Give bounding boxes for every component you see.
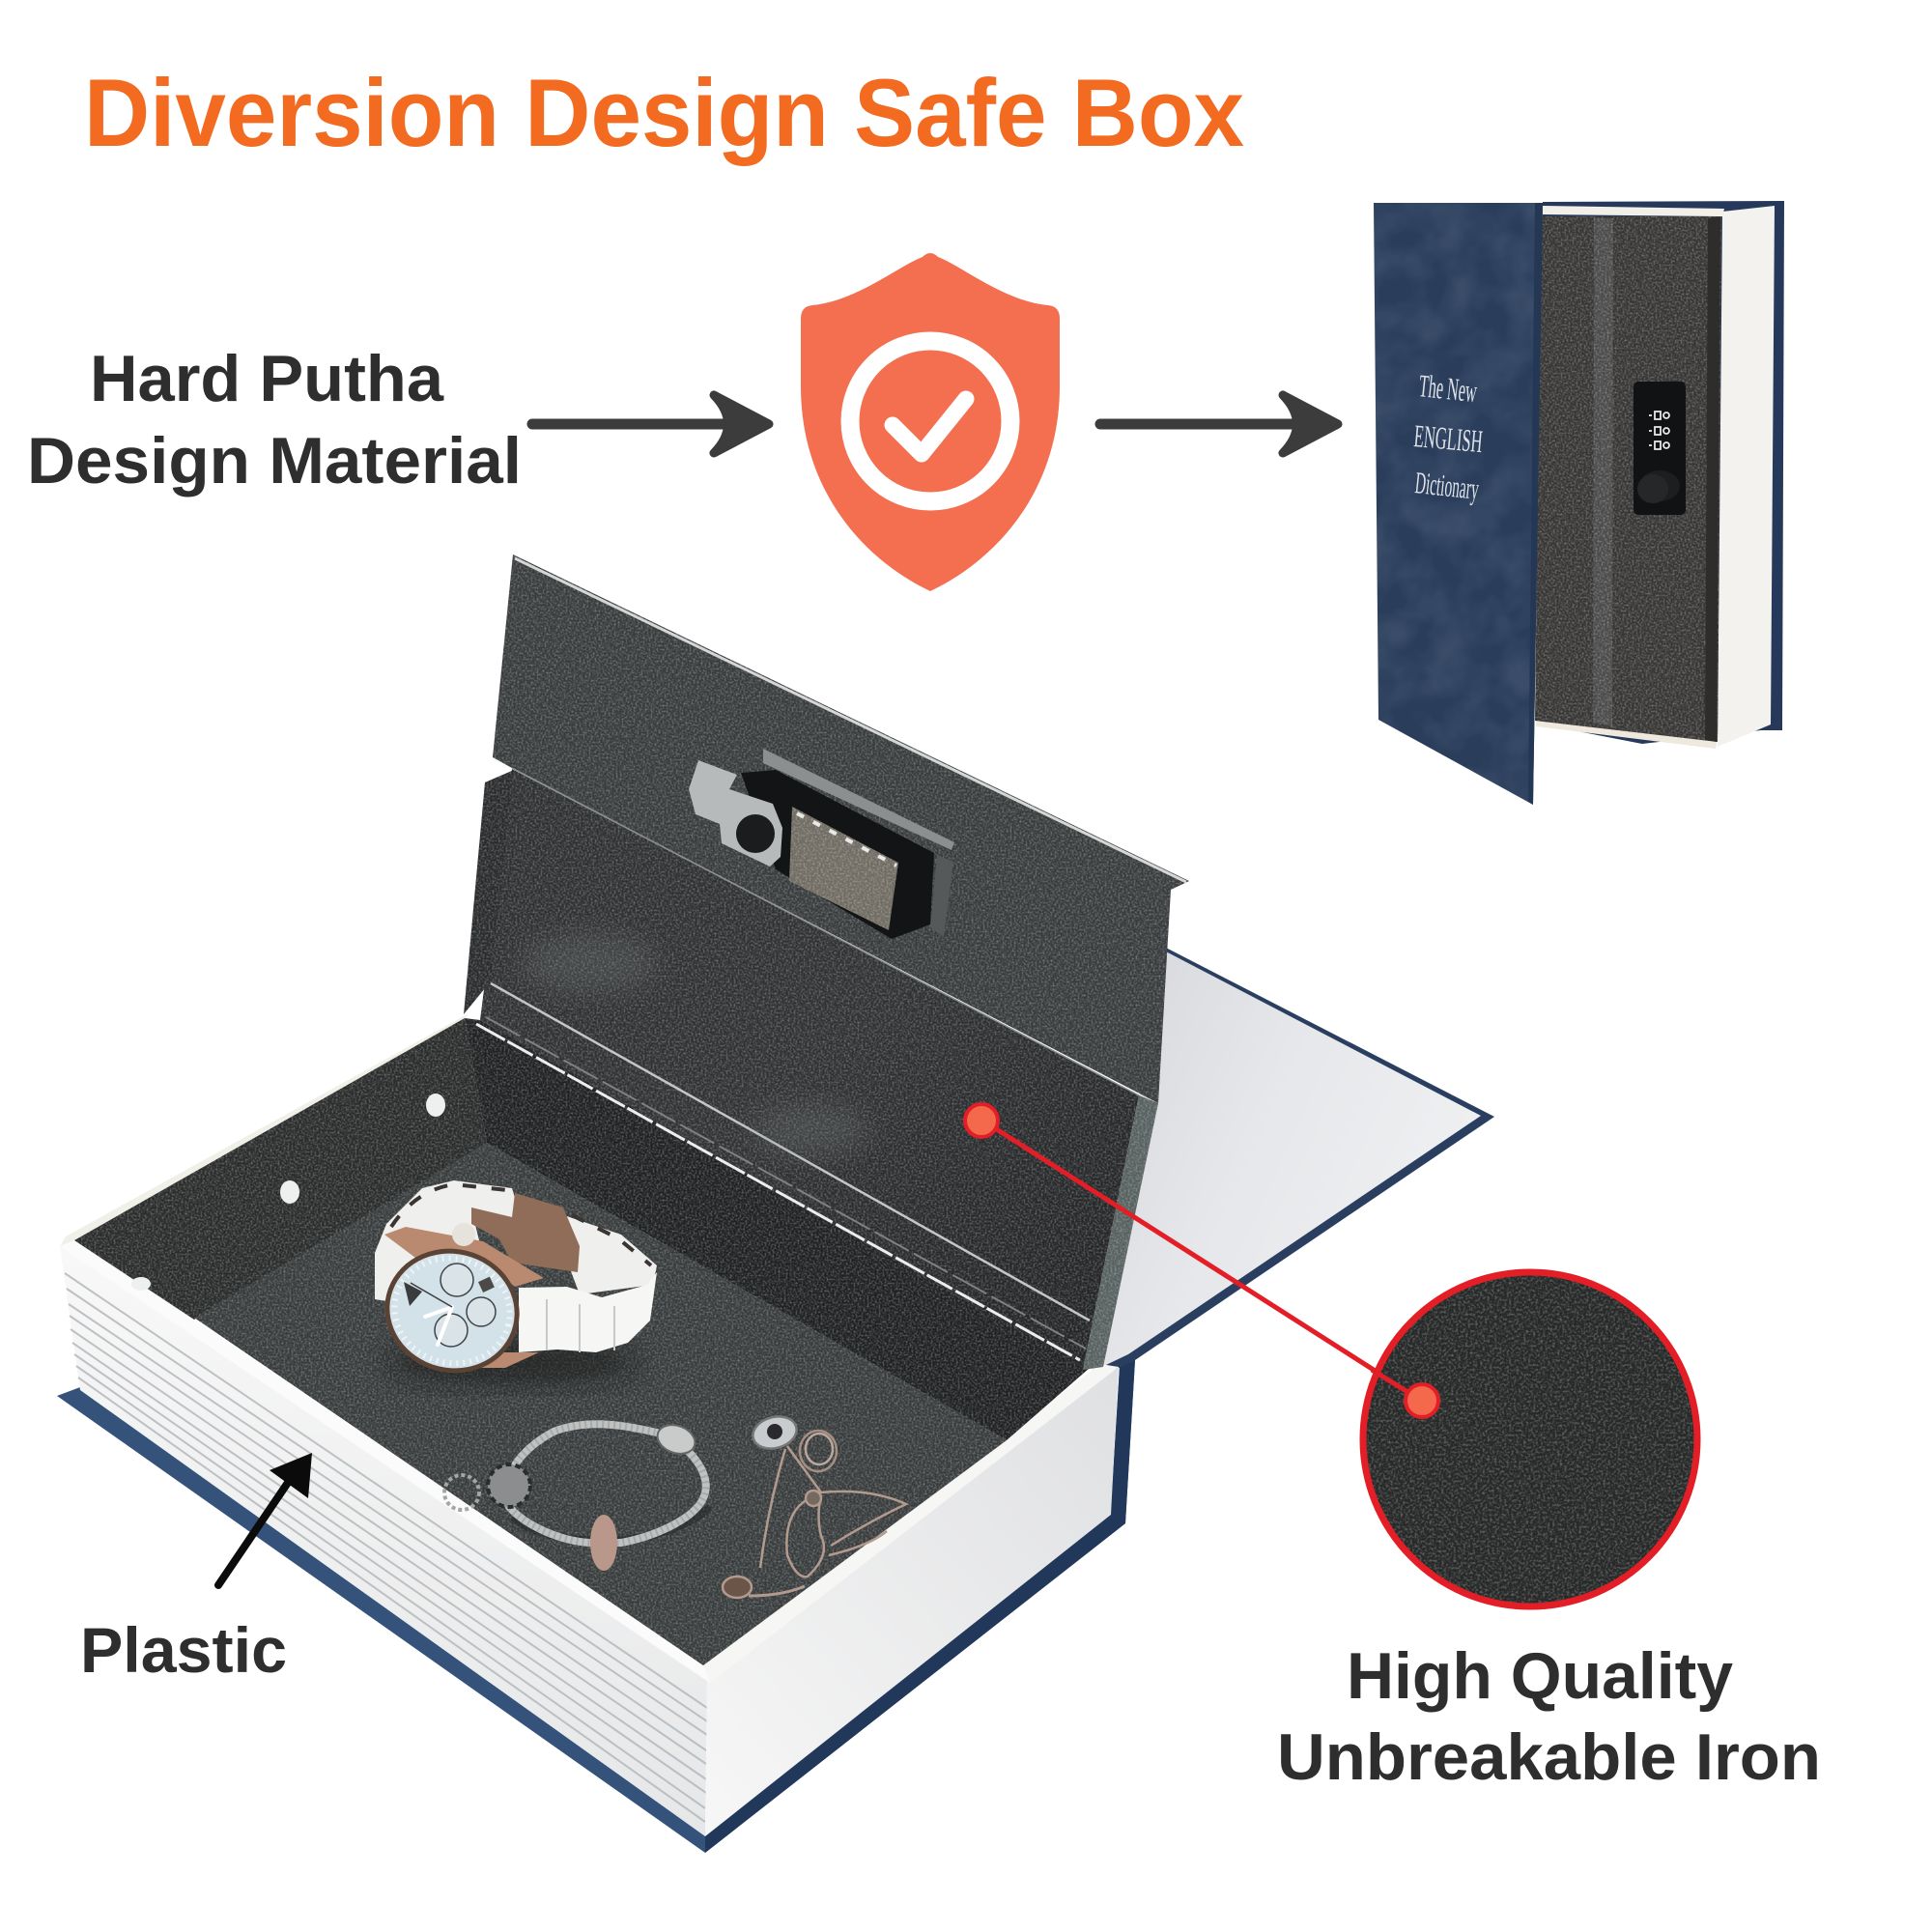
eye pendant — [750, 1412, 800, 1453]
label: High Quality Unbreakable Iron — [1277, 1639, 1821, 1794]
connector line inside circle — [1372, 1370, 1422, 1401]
front cover — [1374, 203, 1543, 805]
cover title text: The New — [1417, 369, 1479, 410]
band near side — [519, 1272, 657, 1352]
hinge sheen — [753, 1105, 869, 1155]
rose gold lug top — [384, 1227, 544, 1287]
chain — [506, 1424, 706, 1543]
dot in circle — [1406, 1384, 1438, 1417]
top page strip — [1543, 206, 1724, 216]
page lines — [65, 1273, 707, 1822]
rose gold bead — [590, 1515, 617, 1571]
bead — [723, 1577, 752, 1598]
photo: open book safe — [57, 554, 1494, 1853]
back cover navy — [1101, 947, 1494, 1377]
band link shading — [391, 1184, 651, 1265]
PCB contacts — [797, 813, 896, 866]
second hand — [411, 1283, 452, 1307]
minute ticks — [384, 1246, 521, 1376]
chains — [760, 1446, 906, 1577]
hinge lines — [476, 768, 1139, 1360]
clasp — [471, 1193, 580, 1272]
chain shadow — [512, 1507, 710, 1541]
arrow: plastic pointer — [218, 1453, 312, 1585]
cover title text: Dictionary — [1413, 465, 1481, 506]
lid upper panel — [493, 554, 1189, 1103]
crown — [452, 1223, 475, 1246]
near link seams — [547, 1299, 614, 1352]
right ridge — [1705, 216, 1720, 742]
lid right side strip — [1083, 1095, 1158, 1370]
page block — [1718, 206, 1775, 747]
label: Plastic: Plastic — [80, 1614, 287, 1686]
PCB face — [789, 807, 898, 930]
cover title text — [1412, 369, 1484, 506]
label: High Quality Unbreakable Iron: Unbreakable Iron — [1277, 1720, 1821, 1794]
logo — [404, 1282, 422, 1306]
case — [372, 1235, 532, 1387]
callout: iron texture magnifier — [965, 1104, 1697, 1606]
knob — [1639, 470, 1680, 501]
arrow: material to shield — [532, 395, 769, 453]
lock mechanism — [689, 749, 954, 939]
pendant — [806, 1491, 821, 1506]
arrow: shield to book — [1100, 395, 1338, 453]
label: High Quality Unbreakable Iron: High Quality — [1347, 1639, 1733, 1713]
zoom circle — [1363, 1272, 1697, 1606]
watch — [372, 1180, 657, 1387]
icon: orange shield with check — [801, 253, 1060, 591]
pendant charm — [444, 1475, 479, 1510]
lid top edge highlight — [515, 558, 1186, 882]
clasp charm — [653, 1420, 699, 1459]
left inner wall — [74, 1018, 487, 1320]
band far side right — [541, 1208, 657, 1294]
floor — [194, 1143, 1007, 1665]
bolt holes — [131, 1094, 445, 1291]
silver cam — [689, 760, 782, 867]
title: Diversion Design Safe Box — [84, 59, 1244, 166]
right page face — [705, 1367, 1119, 1836]
left page face — [60, 1246, 707, 1836]
rings — [800, 1431, 837, 1471]
connector line — [981, 1120, 1422, 1401]
dot on lid — [965, 1104, 998, 1137]
clasp end chain — [749, 1586, 805, 1596]
combination lock plate — [1634, 382, 1686, 515]
back cover — [1543, 201, 1784, 744]
right rim — [703, 1364, 1119, 1683]
lower back wall — [465, 1018, 1090, 1440]
bracket right tab — [930, 855, 953, 937]
lid sheen — [522, 934, 657, 992]
front rim — [60, 1240, 710, 1683]
label: Hard Putha Design Material — [27, 342, 522, 497]
patterned bead — [488, 1464, 530, 1507]
cover title text: ENGLISH — [1412, 419, 1484, 460]
steel ridge — [1593, 218, 1613, 726]
label: Hard Putha Design Material: Design Material — [27, 424, 522, 497]
contact shadow — [386, 1341, 638, 1383]
hands — [425, 1307, 452, 1345]
date window — [478, 1277, 495, 1293]
rose gold lug bottom — [473, 1352, 539, 1368]
photo: closed dictionary safe — [1374, 201, 1784, 805]
black module — [741, 770, 934, 939]
lid inner panel — [480, 769, 1139, 1370]
inner steel box — [1535, 216, 1721, 742]
lid left side strip — [464, 770, 514, 1014]
necklace — [723, 1412, 906, 1598]
bracelet — [444, 1420, 710, 1571]
dial — [378, 1240, 526, 1381]
back-left rim — [60, 1013, 469, 1246]
band far side left — [375, 1180, 522, 1304]
digit wheels — [1649, 412, 1669, 449]
label: Hard Putha Design Material: Hard Putha — [90, 342, 444, 415]
back cover page — [1092, 951, 1481, 1372]
bottom cover and spine — [57, 1360, 1135, 1853]
cam screw — [736, 814, 775, 853]
subdials — [435, 1264, 496, 1347]
bracket bar — [763, 749, 954, 850]
